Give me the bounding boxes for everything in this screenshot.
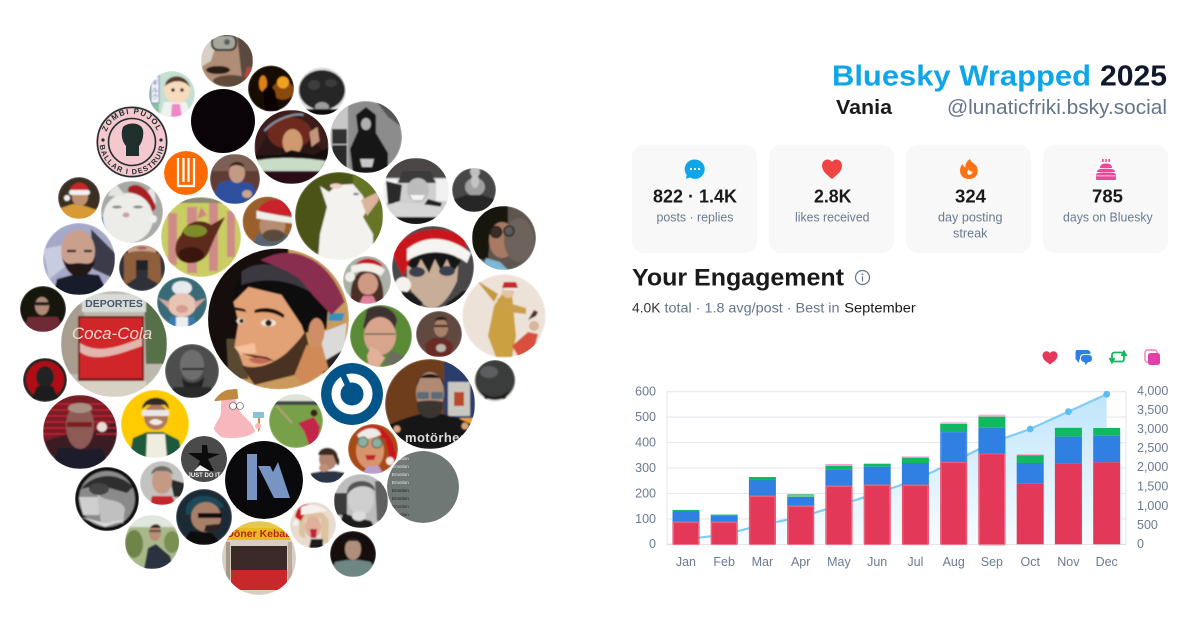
engagement summary: 4.0K [632,300,661,316]
month labels: Dec [1096,555,1118,569]
stat card: days on Bluesky [1043,145,1168,253]
chart legend [1042,350,1160,365]
chart: monthly engagement stacked bars with cumulative line [635,384,1168,569]
avatar: man behind red blinds [43,395,117,469]
bar: Nov [1055,427,1082,544]
right axis labels: 3,500 [1137,403,1168,417]
stacked bars [672,415,1120,545]
left axis labels: 300 [635,461,656,475]
chart grid [667,392,1126,544]
avatar: white cat with santa hat [101,181,163,243]
avatar: black circle [191,89,255,153]
bar: Dec [1093,428,1120,544]
avatar: grey Emotion repeated card: Emotion [392,488,409,493]
engagement summary: total · 1.8 avg/post · Best in [664,300,840,316]
right axis labels: 1,500 [1137,480,1168,494]
bar: Feb [711,514,738,545]
bar: Oct [1017,454,1044,544]
avatar: blue ring logo [321,363,383,425]
user display name: Vania [836,97,893,119]
right axis labels: 1,000 [1137,499,1168,513]
avatar: Coca-Cola bar sign: Coca-Cola [72,324,152,343]
avatar: man in maroon t-shirt [20,286,66,332]
icon: replies legend [1076,350,1092,365]
icon: likes legend [1042,351,1058,364]
stat card: day posting streak [906,145,1031,253]
icon: reposts legend [1110,352,1126,362]
icon: quotes legend [1145,350,1160,365]
avatar: grey Emotion repeated card: Emotion [392,496,409,501]
avatar: pig with chef hat [157,277,207,327]
avatar: cartoon doctor: ギ [152,79,159,87]
month labels: Nov [1057,555,1080,569]
user handle: @lunaticfriki.bsky.social [947,97,1167,119]
avatar: man on yellow background [121,390,189,458]
bar: Sep [978,415,1005,545]
stat card: likes received: 2.8K [814,185,852,206]
right axis labels: 0 [1137,537,1144,551]
avatar: witch with cauldron [254,110,328,184]
avatar: Zombi Pujol badge: BALLAR I DESTRUIR [100,144,164,174]
left axis labels: 500 [635,410,656,424]
avatar: bearded man covering mouth [307,443,347,483]
month labels: Aug [943,555,965,569]
avatar: man in Motörhead shirt [385,359,476,449]
icon: birthday cake [1096,159,1116,180]
month labels: Feb [713,555,735,569]
avatar: old man portrait bw [165,344,219,398]
avatar: bald bearded man [43,223,115,295]
avatar: woman with green glasses and santa hat [348,424,398,474]
avatar: fire silhouette [248,66,294,112]
avatar: orange logo [164,151,208,195]
stat card: days on Bluesky: days on Bluesky [1063,210,1153,224]
bar: Jul [902,456,929,545]
engagement summary [632,300,916,316]
engagement summary: September [844,300,916,316]
avatar: Patrick Star cartoon [214,388,264,438]
icon: flame [960,159,978,179]
cumulative line [686,391,1110,539]
avatar: man in dark red hoodie [416,311,462,357]
icon: heart [822,160,842,179]
avatar: bearded bw portrait [452,167,496,212]
avatar: grey Emotion repeated card: Emotion [392,464,409,469]
avatar: golfer in green field [269,394,323,448]
avatar: Döner Kebab storefront [222,521,296,595]
left axis labels: 600 [635,384,656,398]
avatar: medieval illustration [462,274,546,358]
month labels: Jan [676,555,696,569]
stat card: day posting streak: streak [953,226,988,240]
avatar: Coca-Cola bar sign [61,291,167,397]
avatar: laughing man with hat [383,158,449,225]
avatar: black logo with blue letter [225,441,303,519]
right axis labels: 4,000 [1137,384,1168,398]
avatar: red dark emblem [23,358,67,402]
month labels: Mar [752,555,773,569]
avatar: cartoon doctor [149,71,195,117]
avatar: blonde woman with santa hat [290,502,336,548]
month labels: Apr [791,555,810,569]
icon: chat bubble [685,159,705,179]
month labels: May [827,555,851,569]
left axis labels: 400 [635,436,656,450]
month labels: Jun [867,555,887,569]
avatar: man rubbing eye [350,305,412,367]
avatar: man with santa hat [242,196,292,246]
avatar: cartoon doctor: ク [152,93,158,101]
stat card: day posting streak: day posting [938,210,1003,224]
right axis labels: 3,000 [1137,422,1168,436]
heading: Your Engagement: Your Engagement [632,265,844,292]
left axis labels: 200 [635,486,656,500]
stat card: likes received [769,145,894,253]
avatar: grey Emotion repeated card: Emotion [392,512,409,517]
avatar: black stone ball [474,360,516,402]
avatar: man with grey hair in car [140,461,184,505]
month labels [676,555,1118,569]
month labels: Sep [981,555,1003,569]
avatar: just do it sticker: JUST DO IT [187,473,221,479]
avatar: Zombi Pujol badge [96,106,168,178]
bar: Apr [787,494,814,545]
bar: Mar [749,477,776,545]
stat card: likes received: likes received [795,210,870,224]
avatar: man with round glasses [472,206,536,270]
month labels: Oct [1020,555,1040,569]
avatar: grey Emotion repeated card: Emotion [392,480,409,485]
avatar: grey Emotion repeated card: Emotion [392,472,409,477]
stat card: day posting streak: 324 [955,185,987,206]
left axis labels: 100 [635,512,656,526]
avatar: couple bw vignette [75,467,139,531]
avatar: woman with santa hat [343,256,391,304]
avatar: man with glasses [201,35,253,87]
stat card: days on Bluesky: 785 [1092,185,1123,206]
avatar: grey Emotion repeated card [387,451,459,523]
avatar: just do it sticker [181,436,227,482]
avatar: grey Emotion repeated card: Emotion [392,456,409,461]
bar: Aug [940,422,967,545]
avatar: man in beanie profile [176,489,232,545]
cumulative area [686,394,1107,544]
avatar: main profile photo [208,248,349,390]
bar: Jan [672,510,700,545]
stat card: posts and replies: 822 · 1.4K [653,185,738,206]
bar: Jun [864,464,891,545]
month labels: Jul [907,555,923,569]
avatar: goth portrait black and white [330,101,402,173]
header: title: 2025 [1100,60,1167,92]
right axis labels: 2,000 [1137,460,1168,474]
left axis labels [635,384,656,551]
icon: info [856,270,870,284]
avatar: man outdoors in dark jacket [125,515,180,569]
avatar: Zombi Pujol badge: ZOMBI PUJOL [102,108,160,132]
avatar: smiling man bw [334,474,388,528]
avatar: shaggy hair portrait [298,67,346,115]
avatar: man in grey sweater [330,531,376,577]
left axis labels: 0 [649,537,656,551]
right axis labels [1137,384,1168,551]
stat card: posts and replies [632,145,757,253]
avatar: anime boy with santa hat [392,226,474,308]
stat card: posts and replies: posts · replies [656,210,734,224]
avatar: woman with long hair [119,245,165,291]
avatar: Catalan flag with green creature [161,197,241,277]
avatar: man in Motörhead shirt: motörhead [405,430,476,445]
right axis labels: 500 [1137,518,1158,532]
avatar: Döner Kebab storefront: Döner Kebab [226,528,292,540]
avatar: cartoon doctor: ル [152,87,159,94]
header: title: Bluesky Wrapped [832,60,1091,92]
avatar cluster [20,35,546,595]
right axis labels: 2,500 [1137,441,1168,455]
bar: May [825,464,852,545]
avatar: seated man in blue shirt [210,154,260,204]
avatar: man with santa hat, yellow jacket [58,177,100,219]
avatar: white goat [295,172,383,260]
avatar: Coca-Cola bar sign: DEPORTES [85,298,143,310]
avatar: grey Emotion repeated card: Emotion [392,504,409,509]
